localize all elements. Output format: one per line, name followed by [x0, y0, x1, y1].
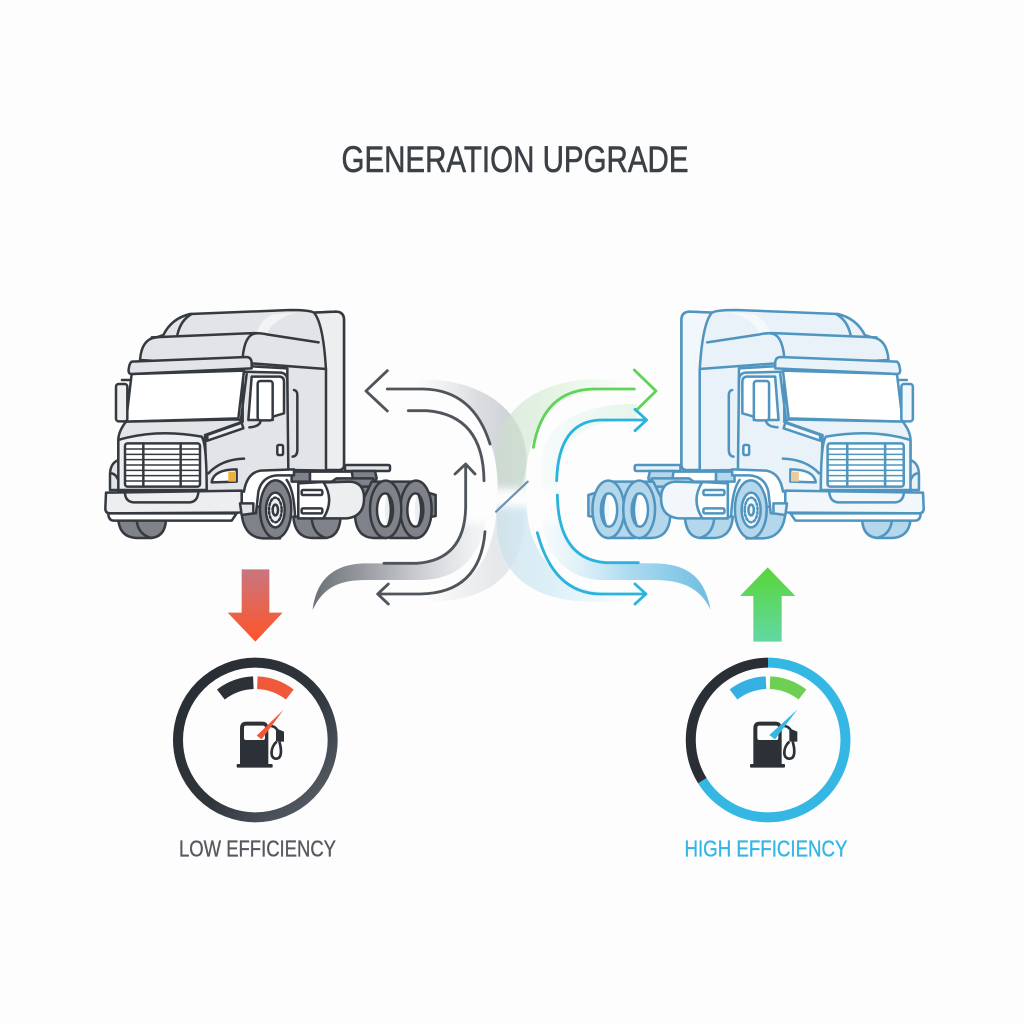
gauge: low efficiency [178, 663, 333, 817]
translucent crossing bands [417, 379, 637, 602]
gauge segments [733, 683, 802, 695]
icon: fuel pump [237, 722, 284, 768]
gauge segments [221, 683, 290, 695]
arrows: blue [537, 409, 647, 604]
diagonal connector [496, 482, 528, 512]
truck: old generation [105, 310, 436, 538]
label: high efficiency: HIGH EFFICIENCY [684, 836, 848, 862]
truck: new generation [588, 310, 924, 538]
ribbon: blue swoosh [542, 517, 711, 610]
gauge: high efficiency [691, 663, 845, 817]
label: low efficiency: LOW EFFICIENCY [179, 836, 336, 862]
gauge needle [769, 710, 797, 739]
central upgrade arrows [313, 370, 711, 610]
gauge ring [178, 663, 333, 817]
ribbon: grey swoosh [313, 517, 487, 610]
title: GENERATION UPGRADE [342, 139, 688, 180]
red down arrow [228, 569, 283, 642]
gauge ring [691, 663, 845, 817]
gauge needle [257, 710, 284, 739]
icon: fuel pump [750, 722, 797, 768]
arrows: grey outgoing [366, 371, 490, 604]
arrow: green [533, 370, 656, 447]
soft fade at centre [462, 488, 563, 523]
green up arrow [740, 567, 795, 642]
